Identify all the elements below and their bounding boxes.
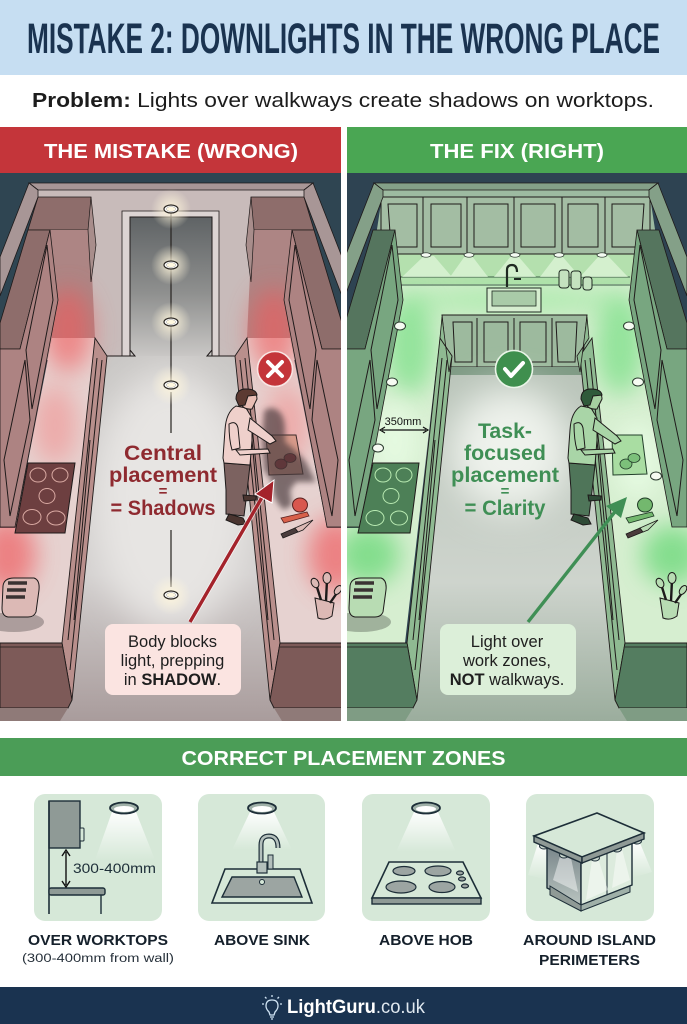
kitchen illustration: central downlights bbox=[0, 173, 364, 721]
hob bbox=[15, 463, 75, 533]
panel: the mistake bbox=[0, 127, 364, 721]
callout: body blocks light bbox=[105, 624, 241, 695]
task-focused placement label bbox=[451, 419, 559, 520]
label: over worktops: OVER WORKTOPS bbox=[28, 933, 168, 949]
toaster bbox=[0, 578, 44, 632]
label: over worktops: (300-400mm from wall) bbox=[22, 953, 174, 965]
callout: light over work zones bbox=[440, 624, 576, 695]
title banner bbox=[0, 0, 687, 75]
under-cabinet light cones bbox=[402, 256, 628, 277]
backsplash glow bbox=[398, 254, 634, 284]
utensil jar bbox=[654, 572, 687, 619]
peninsula cabinets bbox=[442, 315, 587, 375]
dimension: 350mm: 350mm bbox=[385, 416, 421, 428]
card: over worktops bbox=[22, 794, 174, 965]
storage jars bbox=[559, 270, 592, 290]
person shadow bbox=[262, 408, 316, 510]
callout: light over work zones: Light over bbox=[471, 633, 544, 651]
tomato bbox=[292, 498, 308, 512]
panel heading: the mistake: THE MISTAKE (WRONG) bbox=[44, 140, 298, 163]
callout: body blocks light: light, prepping bbox=[121, 652, 224, 670]
problem statement: Problem: Lights over walkways create shadows on worktops. bbox=[32, 90, 654, 112]
task-focused placement label: = Clarity bbox=[464, 496, 546, 520]
vegetable bbox=[638, 498, 652, 512]
task-focused placement label: Task- bbox=[478, 419, 532, 443]
knife bbox=[281, 520, 313, 538]
panel heading: the fix: THE FIX (RIGHT) bbox=[430, 140, 604, 163]
floor bbox=[405, 375, 627, 721]
cutting board bbox=[612, 435, 647, 475]
undercabinet lights bbox=[421, 253, 607, 257]
task-focused placement label: placement bbox=[451, 463, 559, 487]
carrot bbox=[281, 512, 309, 523]
arrow to work zone bbox=[528, 497, 627, 622]
section heading: correct placement zones bbox=[0, 738, 687, 776]
central placement label: = bbox=[159, 483, 168, 500]
hob bbox=[358, 463, 419, 533]
rear wall cabinets bbox=[28, 197, 314, 338]
rear wall cabinets bbox=[381, 197, 650, 285]
knife bbox=[626, 520, 658, 538]
card: above sink bbox=[198, 794, 325, 949]
cutting board bbox=[266, 435, 303, 475]
right cabinet run bbox=[580, 183, 687, 721]
icon: check badge bbox=[496, 350, 532, 388]
label: around island perimeters: PERIMETERS bbox=[539, 953, 640, 969]
central placement label bbox=[110, 444, 217, 515]
toaster bbox=[331, 578, 391, 632]
label: above hob: ABOVE HOB bbox=[379, 933, 473, 949]
wall-mounted downlights bbox=[372, 322, 662, 480]
card: above hob bbox=[362, 794, 490, 949]
callout: light over work zones: work zones, bbox=[462, 652, 551, 670]
footer bbox=[0, 987, 687, 1024]
icon: worktop diagram bbox=[34, 794, 162, 921]
panel heading: the mistake bbox=[0, 127, 341, 173]
person chopping bbox=[568, 389, 621, 525]
left cabinet run bbox=[345, 183, 452, 721]
icon: cross badge bbox=[258, 352, 292, 386]
panel: the fix bbox=[331, 127, 687, 721]
central placement label: placement bbox=[109, 463, 217, 487]
arrow to shadowed worktop bbox=[190, 480, 274, 622]
utensil jar bbox=[309, 572, 343, 619]
cucumber bbox=[626, 512, 654, 523]
task-focused placement label: focused bbox=[464, 441, 546, 465]
right cabinet run bbox=[235, 183, 342, 721]
label: over worktops bbox=[22, 933, 174, 965]
worktops bbox=[0, 338, 342, 643]
downlight row bbox=[151, 189, 191, 615]
central placement label: Central bbox=[124, 441, 202, 465]
panel heading: the fix bbox=[347, 127, 687, 173]
icon: hob diagram bbox=[362, 794, 490, 921]
green glow bbox=[336, 288, 687, 585]
peninsula side returns bbox=[440, 317, 589, 372]
label: around island perimeters bbox=[523, 933, 656, 969]
task-focused placement label: = bbox=[501, 483, 510, 500]
worktop u-shape bbox=[345, 254, 687, 643]
person chopping bbox=[223, 389, 276, 525]
brand name: LightGuru.co.uk bbox=[287, 997, 425, 1018]
card: around island perimeters bbox=[523, 794, 656, 969]
icon: sink diagram bbox=[198, 794, 325, 921]
callout: body blocks light: in SHADOW. bbox=[124, 671, 221, 689]
callout: light over work zones: NOT walkways. bbox=[450, 671, 564, 689]
section heading: correct placement zones: CORRECT PLACEMENT ZONES bbox=[182, 748, 506, 770]
doorway bbox=[107, 211, 235, 356]
callout: body blocks light: Body blocks bbox=[128, 633, 217, 651]
red glow on worktops bbox=[0, 288, 364, 593]
icon: light bulb bbox=[262, 995, 282, 1019]
left cabinet run bbox=[0, 183, 107, 721]
label: around island perimeters: AROUND ISLAND bbox=[523, 933, 656, 949]
central placement label: = Shadows bbox=[110, 496, 216, 520]
dimension: 350mm bbox=[380, 416, 428, 433]
kitchen illustration: task lighting bbox=[331, 173, 687, 721]
floor bbox=[60, 356, 282, 721]
icon: worktop diagram: 300-400mm bbox=[73, 860, 156, 876]
sink and tap bbox=[487, 265, 541, 312]
icon: island diagram bbox=[526, 794, 654, 921]
label: above sink: ABOVE SINK bbox=[214, 933, 311, 949]
